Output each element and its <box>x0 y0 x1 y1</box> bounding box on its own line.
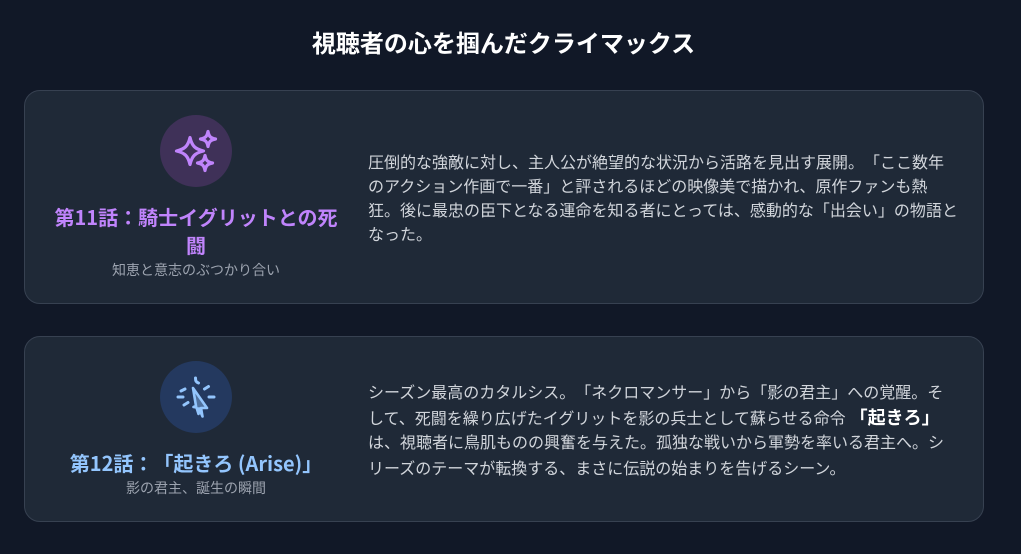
title: 視聴者の心を掴んだクライマックス <box>312 24 695 59</box>
text block: episode 12 description <box>368 379 944 479</box>
heading: episode 11 <box>54 202 338 259</box>
panel: episode 12 <box>24 336 984 522</box>
icon: click pointer <box>160 361 232 433</box>
heading: episode 11: 闘 <box>186 230 206 259</box>
text block: episode 11 description <box>368 149 958 245</box>
panel: episode 11 <box>24 90 984 304</box>
text block: episode 11 description: のアクション作画で一番」と評されるほどの映像美で描かれ、原作ファンも熱 <box>368 173 927 197</box>
icon: sparkles <box>160 115 232 187</box>
text block: episode 11 description: 圧倒的な強敵に対し、主人公が絶望的な状況から活路を見出す展開。「ここ数年 <box>368 149 944 173</box>
subtitle: episode 12: 影の君主、誕生の瞬間 <box>126 478 266 498</box>
text block: episode 12 description: して、死闘を繰り広げたイグリットを影の兵士として蘇らせる命令「起きろ」 <box>368 404 940 430</box>
text block: episode 11 description: なった。 <box>368 221 432 245</box>
text block: episode 12 description: シーズン最高のカタルシス。「ネクロマンサー」から「影の君主」への覚醒。そ <box>368 379 943 403</box>
text block: episode 11 description: 狂。後に最忠の臣下となる運命を知る者にとっては、感動的な「出会い」の物語と <box>368 197 958 221</box>
heading: episode 11: 第11話：騎士イグリットとの死 <box>54 202 338 231</box>
text block: episode 12 description: は、視聴者に鳥肌ものの興奮を与えた。孤独な戦いから軍勢を率いる君主へ。シ <box>368 429 944 453</box>
heading: episode 12: 第12話：「起きろ (Arise)」 <box>70 448 322 477</box>
subtitle: episode 11: 知恵と意志のぶつかり合い <box>112 260 280 280</box>
text block: episode 12 description: リーズのテーマが転換する、まさに伝説の始まりを告げるシーン。 <box>368 455 845 479</box>
